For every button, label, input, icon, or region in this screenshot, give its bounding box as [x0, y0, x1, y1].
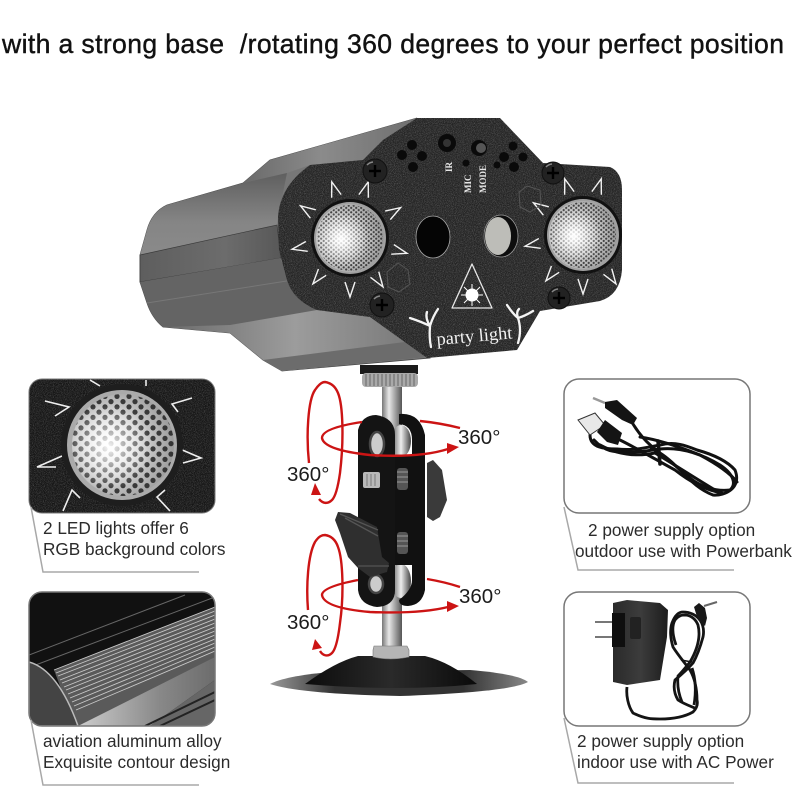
ball joints	[391, 425, 411, 598]
callout line	[31, 507, 199, 572]
panel: aluminium alloy	[29, 592, 230, 785]
knurled knob	[360, 365, 418, 387]
party light text: party light	[436, 322, 513, 349]
USB cable icon	[578, 398, 737, 495]
top horizontal arrow	[322, 421, 460, 456]
caption: indoor use with AC Power	[577, 752, 774, 772]
bottom horizontal arrow	[322, 579, 460, 612]
laser apertures	[416, 215, 518, 258]
panel: powerbank cable	[564, 379, 792, 570]
panel: AC adapter	[564, 592, 774, 783]
caption: 2 power supply option	[588, 520, 755, 540]
base dish	[270, 670, 528, 696]
360 degree labels: 360°	[287, 611, 329, 634]
control labels: MODE	[478, 165, 488, 193]
caption: aviation aluminum alloy	[43, 731, 222, 751]
aluminium shell base	[140, 118, 430, 371]
threaded rod	[382, 386, 402, 648]
callout line	[564, 507, 734, 570]
product: projector body	[140, 110, 630, 371]
hex nut	[373, 646, 409, 659]
dancers	[410, 305, 533, 347]
hexagon marks	[387, 186, 541, 292]
right arm plate	[395, 414, 425, 606]
left arm plate	[358, 415, 395, 607]
caption: Exquisite contour design	[43, 752, 230, 772]
shell close-up	[29, 592, 215, 726]
left knob	[335, 512, 389, 577]
left lens rays	[291, 180, 408, 297]
base dome	[305, 656, 477, 688]
control labels	[444, 161, 488, 193]
caption: 2 power supply option	[577, 731, 744, 751]
left lens	[311, 199, 389, 277]
bottom vertical arrow	[307, 535, 342, 655]
product: mount and base	[270, 365, 528, 696]
caption: 2 LED lights offer 6	[43, 518, 189, 538]
speaker holes and controls	[397, 134, 528, 172]
caption: outdoor use with Powerbank	[575, 541, 792, 561]
360 degree labels: 360°	[458, 426, 500, 449]
shell bands	[140, 118, 427, 371]
screws	[363, 159, 570, 317]
title: with a strong base /rotating 360 degrees to your perfect position	[1, 29, 784, 59]
plate holes and bolts	[363, 432, 408, 593]
control labels: IR	[444, 161, 454, 172]
laser warning triangle	[452, 264, 492, 308]
control labels: MIC	[463, 174, 473, 193]
caption: RGB background colors	[43, 539, 225, 559]
top vertical arrow	[308, 382, 342, 503]
right lens	[544, 196, 622, 274]
front plate	[278, 118, 622, 358]
LED close-up	[29, 379, 215, 513]
callout line	[31, 720, 199, 785]
panel: LED lights	[29, 379, 225, 572]
360 degree labels: 360°	[459, 585, 501, 608]
red rotation arrows	[307, 382, 460, 655]
right lens rays	[524, 177, 620, 294]
callout line	[564, 718, 734, 783]
360 degree labels: 360°	[287, 463, 329, 486]
360 degree labels	[287, 426, 501, 634]
AC adapter icon	[595, 600, 717, 719]
right knob	[427, 460, 447, 521]
